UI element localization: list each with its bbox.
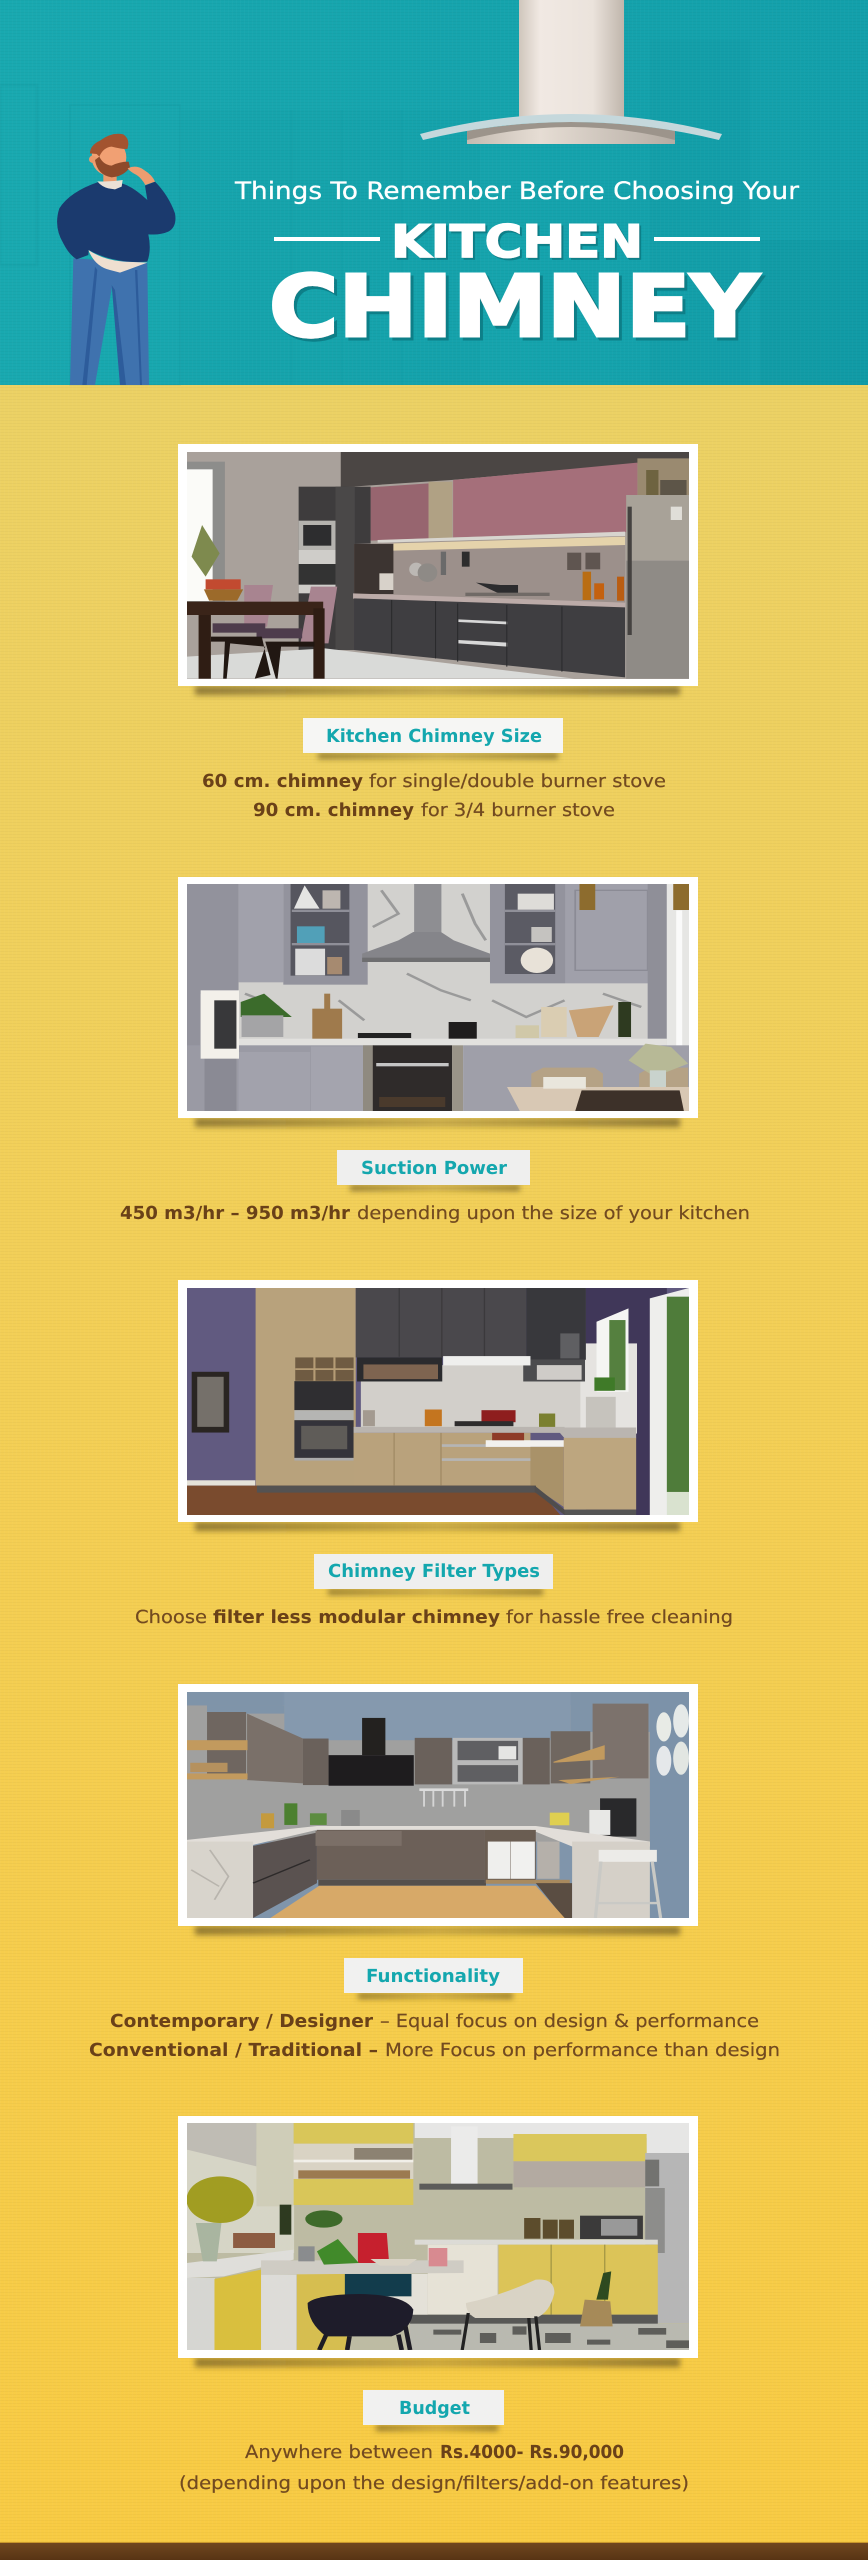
ghost kitchen backdrop	[0, 40, 868, 385]
collar	[97, 180, 123, 189]
description text	[135, 1607, 733, 1628]
section 1: Kitchen Chimney Size	[178, 444, 698, 821]
description text: 60 cm. chimney	[202, 771, 363, 792]
description text: filter less modular chimney	[213, 1607, 500, 1628]
description text: 90 cm. chimney	[253, 800, 414, 821]
description text: for hassle free cleaning	[506, 1607, 733, 1628]
photo card: grey marble kitchen	[178, 877, 698, 1127]
header banner	[0, 0, 868, 385]
description text: for 3/4 burner stove	[421, 800, 615, 821]
description text: Rs.4000- Rs.90,000	[440, 2442, 624, 2463]
title rules	[274, 237, 760, 241]
photo card: yellow kitchen	[178, 2116, 698, 2367]
heading label: Budget	[399, 2398, 470, 2419]
subtitle line: Things To Remember Before Choosing Your	[234, 177, 799, 205]
description text	[89, 2011, 780, 2061]
sweater	[57, 182, 175, 262]
KITCHEN: KITCHEN	[391, 215, 643, 268]
icon: range hood chimney	[420, 0, 722, 144]
description text: Choose	[135, 1607, 207, 1628]
head	[92, 139, 126, 176]
photo card: pink and charcoal kitchen	[178, 444, 698, 695]
heading label: Kitchen Chimney Size	[326, 726, 542, 747]
heading label	[363, 2390, 504, 2431]
shirt hem	[88, 250, 147, 273]
illustration: thinking man	[57, 134, 175, 385]
hair	[90, 134, 128, 157]
description text: – Equal focus on design & performance	[380, 2011, 759, 2032]
heading label: Functionality	[366, 1966, 500, 1987]
beard	[95, 157, 130, 177]
CHIMNEY: CHIMNEY	[269, 258, 761, 357]
heading label: Suction Power	[361, 1158, 507, 1179]
trousers	[70, 258, 149, 385]
photo card: wood and purple kitchen	[178, 1280, 698, 1531]
footer band	[0, 2542, 868, 2560]
neck	[103, 170, 117, 185]
section 4: Functionality	[89, 1684, 780, 2061]
heading label	[303, 718, 563, 759]
description text: Contemporary / Designer	[110, 2011, 373, 2032]
description text: 450 m3/hr – 950 m3/hr	[120, 1203, 350, 1224]
description text	[202, 771, 666, 821]
description text: for single/double burner stove	[369, 771, 666, 792]
section 3: Chimney Filter Types	[135, 1280, 733, 1628]
description text	[120, 1203, 750, 1224]
heading label	[337, 1150, 530, 1191]
description text: Conventional / Traditional –	[89, 2040, 378, 2061]
heading label: Chimney Filter Types	[328, 1561, 540, 1582]
description text: depending upon the size of your kitchen	[357, 1203, 750, 1224]
hand	[128, 167, 155, 185]
heading label	[344, 1958, 523, 1999]
description text: More Focus on performance than design	[385, 2040, 780, 2061]
heading label	[314, 1554, 553, 1595]
description text	[179, 2442, 689, 2494]
section 2: Suction Power	[120, 877, 750, 1224]
photo card: U-shaped taupe kitchen	[178, 1684, 698, 1935]
section 5: Budget	[178, 2116, 698, 2494]
title	[234, 177, 799, 357]
description text: Anywhere between	[245, 2442, 433, 2463]
description text: (depending upon the design/filters/add-on features)	[179, 2473, 689, 2494]
